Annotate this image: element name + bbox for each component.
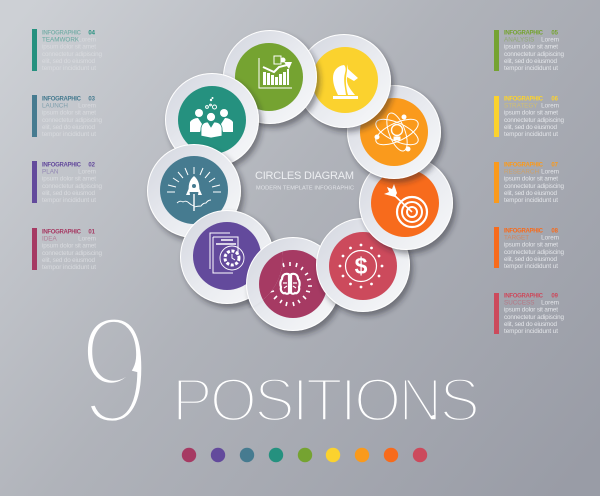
text block 08 target: tempor incididunt ut: [504, 263, 558, 270]
text block 07 research: ipsum dolor sit amet: [504, 176, 558, 183]
text block 02 plan: elit, sed do eiusmod: [42, 190, 95, 197]
text block 03 launch: connectetur adipiscing: [42, 117, 102, 124]
text block 09 success: elit, sed do eiusmod: [504, 321, 557, 328]
text block 08 target: TARGET: [504, 235, 529, 242]
text block 09 success: [494, 293, 564, 335]
text block 05 analysis: connectetur adipiscing: [504, 51, 564, 58]
text block 09 success: tempor incididunt ut: [504, 328, 558, 335]
text block 09 success: connectetur adipiscing: [504, 314, 564, 321]
circle 02 plan: document and gear: [180, 210, 274, 304]
text block 05 analysis: tempor incididunt ut: [504, 65, 558, 72]
circle 07 research: atom: [347, 85, 441, 179]
diagram title: CIRCLES DIAGRAM: [255, 170, 354, 182]
text block 01 idea: Lorem: [78, 236, 96, 243]
icon: chess knight: [333, 64, 358, 99]
circle 09 success: dollar: [316, 218, 410, 312]
text block 02 plan: tempor incididunt ut: [42, 197, 96, 204]
text block 06 strategy: Lorem: [541, 103, 559, 110]
icon: brain: [268, 262, 312, 306]
text block 07 research: RESEARCH: [504, 169, 539, 176]
text block 09 success: 09: [551, 294, 559, 300]
text block 01 idea: 01: [88, 230, 96, 236]
text block 01 idea: INFOGRAPHIC: [42, 230, 82, 236]
text block 08 target: ipsum dolor sit amet: [504, 242, 558, 249]
text block 01 idea: IDEA: [42, 236, 57, 243]
circle 01 idea: brain: [246, 237, 340, 331]
circle 03 launch: rocket: [147, 144, 241, 238]
text block 06 strategy: tempor incididunt ut: [504, 131, 558, 138]
colour dots row: [182, 448, 427, 462]
circle 08 target: [359, 156, 453, 250]
circle 04 teamwork: people: [165, 73, 259, 167]
text block 01 idea: elit, sed do eiusmod: [42, 257, 95, 264]
icon: atom with bulb: [372, 110, 422, 154]
text block 02 plan: INFOGRAPHIC: [42, 162, 82, 168]
text block 08 target: connectetur adipiscing: [504, 249, 564, 256]
text block 03 launch: 03: [88, 96, 96, 102]
diagram subtitle: MODERN TEMPLATE INFOGRAPHIC: [256, 186, 354, 192]
text block 07 research: connectetur adipiscing: [504, 183, 564, 190]
text block 05 analysis: Lorem: [541, 37, 559, 44]
text block 01 idea: ipsum dolor sit amet: [42, 243, 96, 250]
text block 09 success: INFOGRAPHIC: [504, 294, 544, 300]
text block 01 idea: tempor incididunt ut: [42, 264, 96, 271]
circle 06 strategy: knight: [297, 34, 391, 128]
text block 01 idea: [32, 228, 102, 271]
icon: growth chart: [259, 56, 292, 88]
text block 03 launch: tempor incididunt ut: [42, 131, 96, 138]
text block 05 analysis: ANALYSIS: [504, 37, 534, 44]
text block 04 teamwork: [32, 29, 102, 72]
text block 03 launch: INFOGRAPHIC: [42, 96, 82, 102]
text block 08 target: [494, 227, 564, 270]
text block 05 analysis: 05: [551, 30, 559, 36]
circle 05 analysis: chart: [223, 30, 317, 124]
POSITIONS heading: POSITIONS: [172, 366, 480, 434]
text block 09 success: SUCCESS: [504, 300, 534, 307]
text block 08 target: elit, sed do eiusmod: [504, 256, 557, 263]
text block 04 teamwork: 04: [88, 30, 96, 36]
text block 04 teamwork: TEAMWORK: [42, 37, 80, 44]
text block 07 research: INFOGRAPHIC: [504, 162, 544, 168]
text block 04 teamwork: connectetur adipiscing: [42, 51, 102, 58]
text block 02 plan: connectetur adipiscing: [42, 183, 102, 190]
text block 06 strategy: ipsum dolor sit amet: [504, 110, 558, 117]
text block 07 research: [494, 162, 564, 204]
text block 07 research: tempor incididunt ut: [504, 197, 558, 204]
text block 06 strategy: elit, sed do eiusmod: [504, 124, 557, 131]
text block 07 research: elit, sed do eiusmod: [504, 190, 557, 197]
text block 09 success: ipsum dolor sit amet: [504, 307, 558, 314]
text block 04 teamwork: elit, sed do eiusmod: [42, 58, 95, 65]
text block 04 teamwork: INFOGRAPHIC: [42, 30, 82, 36]
text block 08 target: INFOGRAPHIC: [504, 228, 544, 234]
icon: rocket with rays: [167, 167, 221, 211]
text block 04 teamwork: ipsum dolor sit amet: [42, 44, 96, 51]
text block 06 strategy: 06: [551, 96, 559, 102]
text block 03 launch: elit, sed do eiusmod: [42, 124, 95, 131]
text block 06 strategy: INFOGRAPHIC: [504, 96, 544, 102]
text block 07 research: 07: [551, 162, 559, 168]
text block 05 analysis: INFOGRAPHIC: [504, 30, 544, 36]
text block 01 idea: connectetur adipiscing: [42, 250, 102, 257]
text block 02 plan: Lorem: [78, 169, 96, 176]
text block 02 plan: [32, 161, 102, 204]
text block 07 research: Lorem: [541, 169, 559, 176]
icon: team: [190, 98, 233, 138]
text block 08 target: 08: [551, 228, 559, 234]
text block 04 teamwork: Lorem: [78, 37, 96, 44]
circle 01 overlap on circle 02: [245, 238, 283, 308]
text block 05 analysis: ipsum dolor sit amet: [504, 44, 558, 51]
icon: dollar coin: $: [355, 253, 368, 279]
icon: documents with gear: [210, 233, 244, 273]
big number 9: 9: [78, 284, 151, 457]
text block 03 launch: LAUNCH: [42, 103, 68, 110]
text block 06 strategy: STRATEGY: [504, 103, 538, 110]
text block 06 strategy: [494, 96, 564, 138]
text block 03 launch: [32, 95, 102, 138]
text block 05 analysis: elit, sed do eiusmod: [504, 58, 557, 65]
text block 09 success: Lorem: [541, 300, 559, 307]
text block 02 plan: 02: [88, 162, 96, 168]
text block 02 plan: ipsum dolor sit amet: [42, 176, 96, 183]
text block 08 target: Lorem: [541, 235, 559, 242]
text block 03 launch: ipsum dolor sit amet: [42, 110, 96, 117]
text block 03 launch: Lorem: [78, 103, 96, 110]
text block 05 analysis: [494, 30, 564, 72]
icon: target and arrow: [384, 184, 427, 227]
text block 06 strategy: connectetur adipiscing: [504, 117, 564, 124]
text block 02 plan: PLAN: [42, 169, 59, 176]
text block 04 teamwork: tempor incididunt ut: [42, 65, 96, 72]
